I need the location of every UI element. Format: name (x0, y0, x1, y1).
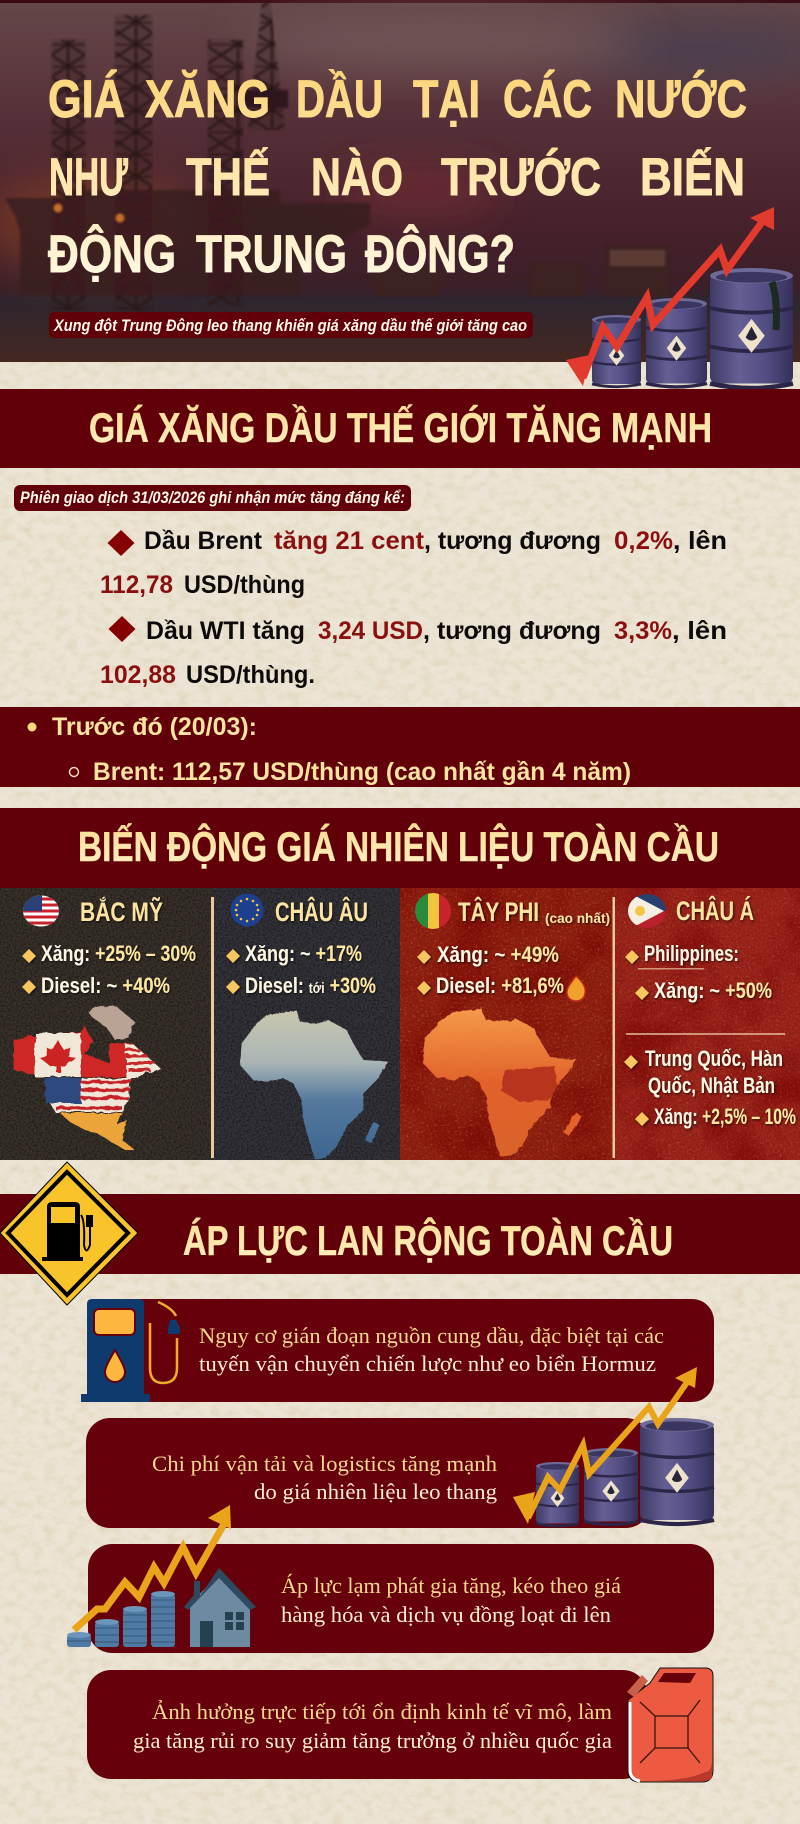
text block: Brent: 0,2% (614, 527, 673, 555)
panel: Asia (614, 888, 800, 1160)
card: inflation pressure: hàng hóa và dịch vụ đồng loạt đi lên (281, 1602, 611, 1627)
map: Africa in orange tones (423, 1008, 581, 1157)
callout: trading session (14, 485, 411, 511)
card: logistics costs: Chi phí vận tải và logistics tăng mạnh (152, 1451, 497, 1476)
stats: North America (22, 896, 196, 998)
card: supply risk: tuyến vận chuyển chiến lược như eo biển Hormuz (199, 1351, 656, 1376)
title: NÀO (311, 147, 403, 207)
stats: Asia: CHÂU Á (676, 895, 754, 926)
title: NHƯ (49, 148, 128, 207)
panel: previous price: Trước đó (20/03): (52, 713, 257, 741)
card: macro stability: Ảnh hưởng trực tiếp tới ổn định kinh tế vĩ mô, làm (152, 1699, 612, 1724)
text block: Brent: USD/thùng (184, 571, 305, 599)
heading band: global fuel changes (0, 808, 800, 888)
heading band: global pressure (0, 1194, 800, 1274)
card: inflation pressure: Áp lực lạm phát gia tăng, kéo theo giá (281, 1573, 621, 1598)
text block: Brent: , lên (673, 527, 727, 555)
title: TẠI (413, 70, 480, 129)
card: macro stability (87, 1668, 713, 1782)
stats: Europe: Xăng: ~ +17% (245, 941, 362, 966)
text block: WTI: Dầu WTI tăng (146, 617, 305, 645)
panel: West Africa (400, 888, 614, 1160)
icon: flame (567, 976, 585, 1001)
title: TRUNG (196, 225, 347, 284)
subtitle: Xung đột Trung Đông leo thang khiến giá xăng dầu thế giới tăng cao (53, 316, 527, 335)
title (48, 69, 747, 284)
icon: barrels with gold arrow (513, 1367, 714, 1526)
card: inflation pressure (67, 1505, 714, 1653)
text block: WTI: , tương đương (423, 617, 601, 645)
stats: Europe: CHÂU ÂU (275, 896, 368, 927)
card: logistics costs: do giá nhiên liệu leo thang (254, 1479, 497, 1504)
icon: Philippines flag (628, 894, 666, 928)
text block: Brent: Dầu Brent (144, 527, 263, 555)
title: XĂNG (145, 69, 270, 129)
stats: Europe: Diesel: tới +30% (245, 973, 376, 998)
stats: West Africa: TÂY PHI (458, 896, 539, 927)
icon: fuel pump (81, 1299, 180, 1402)
stats: Asia: Xăng: ~ +50% (654, 978, 772, 1003)
heading band: world prices (0, 389, 800, 468)
title: CÁC (503, 69, 592, 129)
stats: West Africa: Xăng: ~ +49% (437, 942, 559, 967)
title: NƯỚC (615, 69, 747, 129)
card: supply risk: Nguy cơ gián đoạn nguồn cung dầu, đặc biệt tại các (199, 1323, 664, 1348)
text block: WTI: 3,3% (614, 617, 672, 645)
text block: WTI: USD/thùng. (186, 661, 315, 689)
icon: coin stacks, house and rising arrow (67, 1505, 256, 1647)
stats: West Africa: (cao nhất) (545, 910, 610, 926)
title: ĐÔNG? (365, 223, 515, 284)
hero photo: oil rigs at dusk (0, 0, 800, 362)
panel: previous price: Brent: 112,57 USD/thùng (cao nhất gần 4 năm) (93, 758, 631, 786)
stats: Asia (624, 895, 796, 1129)
title: BIẾN (640, 147, 745, 207)
stats: Asia: Philippines: (644, 941, 739, 966)
stats: West Africa: Diesel: +81,6% (436, 973, 564, 998)
title: TRƯỚC (441, 147, 601, 207)
text block: Brent: , tương đương (424, 527, 601, 555)
callout: trading session: Phiên giao dịch 31/03/2026 ghi nhận mức tăng đáng kể: (20, 488, 405, 507)
icon: EU flag (230, 894, 264, 926)
subtitle (49, 312, 533, 338)
icon: US flag (23, 895, 59, 927)
stats: North America: Diesel: ~ +40% (41, 973, 170, 998)
stats: North America: Xăng: +25% – 30% (41, 941, 196, 966)
heading band: global pressure: ÁP LỰC LAN RỘNG TOÀN CẦU (183, 1216, 673, 1264)
map: Africa in blue tones (240, 1011, 388, 1159)
card: supply risk (81, 1299, 714, 1402)
text block: Brent (100, 527, 727, 599)
card: macro stability: gia tăng rủi ro suy giảm tăng trưởng ở nhiều quốc gia (133, 1728, 612, 1753)
title: DẦU (296, 69, 383, 129)
panel: North America (0, 888, 213, 1160)
icon: red jerry can (627, 1668, 713, 1782)
map: North America in flag colours (14, 1006, 160, 1150)
icon: fuel warning sign (0, 1162, 138, 1305)
stats: Europe (226, 896, 376, 998)
stats: West Africa (417, 896, 610, 998)
hero panel (0, 0, 800, 362)
text block: WTI (100, 616, 727, 689)
icon: oil barrels with red arrow (566, 207, 793, 388)
title: GIÁ (48, 69, 125, 129)
text block: Brent: tăng 21 cent (274, 527, 425, 555)
title: ĐỘNG (48, 223, 176, 284)
text block: WTI: 3,24 USD (318, 617, 423, 645)
panel: previous price (0, 707, 800, 787)
text block: Brent: 112,78 (100, 571, 173, 599)
stats: North America: BẮC MỸ (80, 896, 163, 927)
text block: WTI: , lên (672, 617, 727, 645)
icon: Mali flag (415, 893, 452, 929)
panel: Europe (213, 888, 400, 1160)
card: logistics costs (86, 1367, 714, 1528)
title: THẾ (186, 147, 270, 207)
text block: WTI: 102,88 (100, 661, 176, 689)
